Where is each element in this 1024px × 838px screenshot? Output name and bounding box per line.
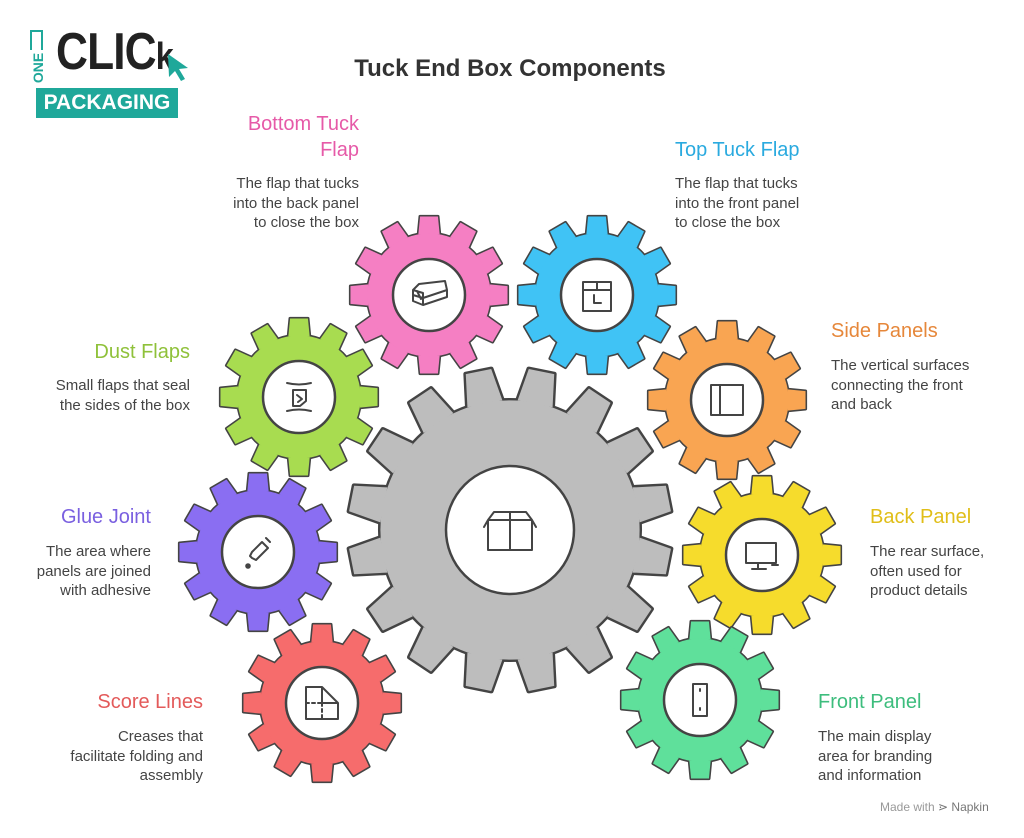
label: front panel: Front Panel [818,691,921,713]
label: front panel: area for branding [818,748,932,764]
label: bottom tuck flap: to close the box [254,214,359,231]
gear: bottom tuck flap pink [350,216,508,374]
gear: central gray [348,368,672,692]
label: back panel: Back Panel [870,506,971,528]
label: dust flaps: the sides of the box [60,396,190,414]
gear: glue joint purple [179,473,337,631]
label: bottom tuck flap: into the back panel [233,194,359,212]
label: back panel [870,506,984,599]
label: front panel: The main display [818,728,931,745]
label: score lines [70,691,203,784]
label: top tuck flap: to close the box [675,214,780,231]
label: glue joint: panels are joined [37,562,151,580]
label: score lines: Creases that [118,728,203,745]
label: score lines: facilitate folding and [70,748,203,764]
label: glue joint: The area where [46,543,151,560]
label: bottom tuck flap: Flap [320,139,359,161]
label: top tuck flap: Top Tuck Flap [675,139,800,161]
label: side panels [831,320,969,413]
label: top tuck flap: The flap that tucks [675,175,798,192]
label: dust flaps [56,341,190,414]
label: score lines: assembly [140,767,203,784]
label: glue joint: Glue Joint [61,506,151,528]
gear: top tuck flap blue [518,216,676,374]
title: Tuck End Box Components [354,55,666,82]
label: bottom tuck flap: Bottom Tuck [248,113,359,135]
gear: back panel yellow [683,476,841,634]
label: side panels: connecting the front [831,376,963,394]
label: side panels: Side Panels [831,320,938,342]
label: score lines: Score Lines [97,691,203,713]
label: dust flaps: Small flaps that seal [56,377,190,394]
label: dust flaps: Dust Flaps [94,341,190,363]
logo: PACKAGING banner [36,88,178,118]
label: back panel: often used for [870,562,962,580]
label: top tuck flap: into the front panel [675,194,799,212]
label: back panel: The rear surface, [870,543,984,560]
logo: cursor [168,54,188,81]
label: bottom tuck flap [233,113,359,231]
label: back panel: product details [870,582,968,599]
label: side panels: The vertical surfaces [831,357,969,374]
label: front panel [818,691,932,784]
label: glue joint [37,506,151,599]
logo: ONE vertical: ONE [30,53,46,83]
gear: side panels orange [648,321,806,479]
logo [30,23,188,118]
gear: front panel teal [621,621,779,779]
footer: made with napkin: Made with ⋗ Napkin [880,800,989,814]
logo: CLICK: CLICk [56,23,173,81]
gear: dust flaps green [220,318,378,476]
label: glue joint: with adhesive [60,582,151,599]
logo: PACKAGING banner: PACKAGING [44,91,170,114]
label: side panels: and back [831,396,892,413]
label: bottom tuck flap: The flap that tucks [236,175,359,192]
gear: score lines red [243,624,401,782]
label: top tuck flap [675,139,800,231]
label: front panel: and information [818,767,921,784]
